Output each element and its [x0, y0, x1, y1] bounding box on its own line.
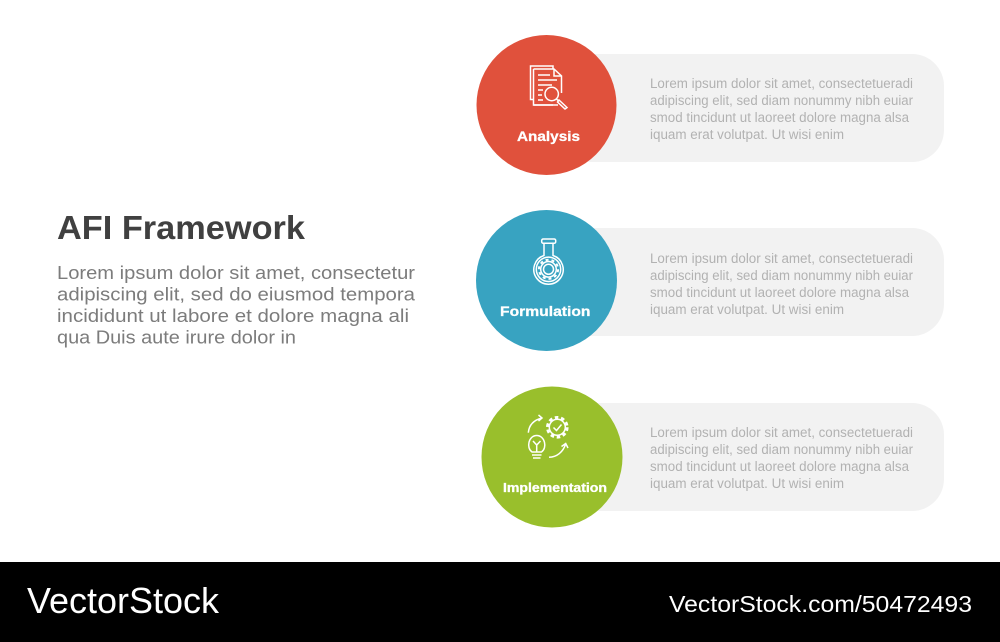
formulation description: iquam erat volutpat. Ut wisi enim [650, 302, 844, 317]
implementation description: Lorem ipsum dolor sit amet, consectetueradi [650, 425, 913, 440]
implementation description: adipiscing elit, sed diam nonummy nibh euiar [650, 442, 913, 457]
formulation description [650, 251, 913, 317]
icon: gear, bulb and arrows [528, 415, 568, 458]
footer bar [0, 562, 1000, 642]
analysis description [650, 76, 913, 142]
title: AFI Framework [57, 209, 306, 246]
icon: flask with gear [534, 239, 563, 284]
panel: implementation [482, 386, 944, 528]
footer image id: VectorStock.com/50472493 [669, 591, 972, 617]
formulation text pill [560, 228, 944, 336]
implementation description: iquam erat volutpat. Ut wisi enim [650, 476, 844, 491]
formulation description: adipiscing elit, sed diam nonummy nibh euiar [650, 268, 913, 283]
implementation text pill [560, 403, 944, 511]
implementation description: smod tincidunt ut laoreet dolore magna alsa [650, 459, 909, 474]
implementation description [650, 425, 913, 491]
intro text block: qua Duis aute irure dolor in [57, 326, 296, 348]
panel: analysis [476, 35, 944, 175]
implementation label: Implementation [503, 481, 607, 495]
formulation label: Formulation [500, 303, 590, 319]
analysis description: adipiscing elit, sed diam nonummy nibh euiar [650, 93, 913, 108]
analysis label: Analysis [517, 128, 580, 144]
implementation circle [482, 386, 622, 528]
intro text block: Lorem ipsum dolor sit amet, consectetur [57, 262, 415, 283]
analysis circle [476, 35, 616, 175]
formulation description: Lorem ipsum dolor sit amet, consectetueradi [650, 251, 913, 266]
analysis description: smod tincidunt ut laoreet dolore magna alsa [650, 110, 909, 125]
intro text block [57, 262, 416, 348]
analysis description: Lorem ipsum dolor sit amet, consectetueradi [650, 76, 913, 91]
footer brand: VectorStock [27, 580, 220, 621]
analysis text pill [560, 54, 944, 162]
analysis description: iquam erat volutpat. Ut wisi enim [650, 127, 844, 142]
formulation description: smod tincidunt ut laoreet dolore magna alsa [650, 285, 909, 300]
formulation circle [476, 210, 617, 351]
intro text block: incididunt ut labore et dolore magna ali [57, 305, 409, 326]
icon: document with magnifier [530, 66, 567, 109]
panel: formulation [476, 210, 944, 351]
intro text block: adipiscing elit, sed do eiusmod tempora [57, 284, 416, 304]
